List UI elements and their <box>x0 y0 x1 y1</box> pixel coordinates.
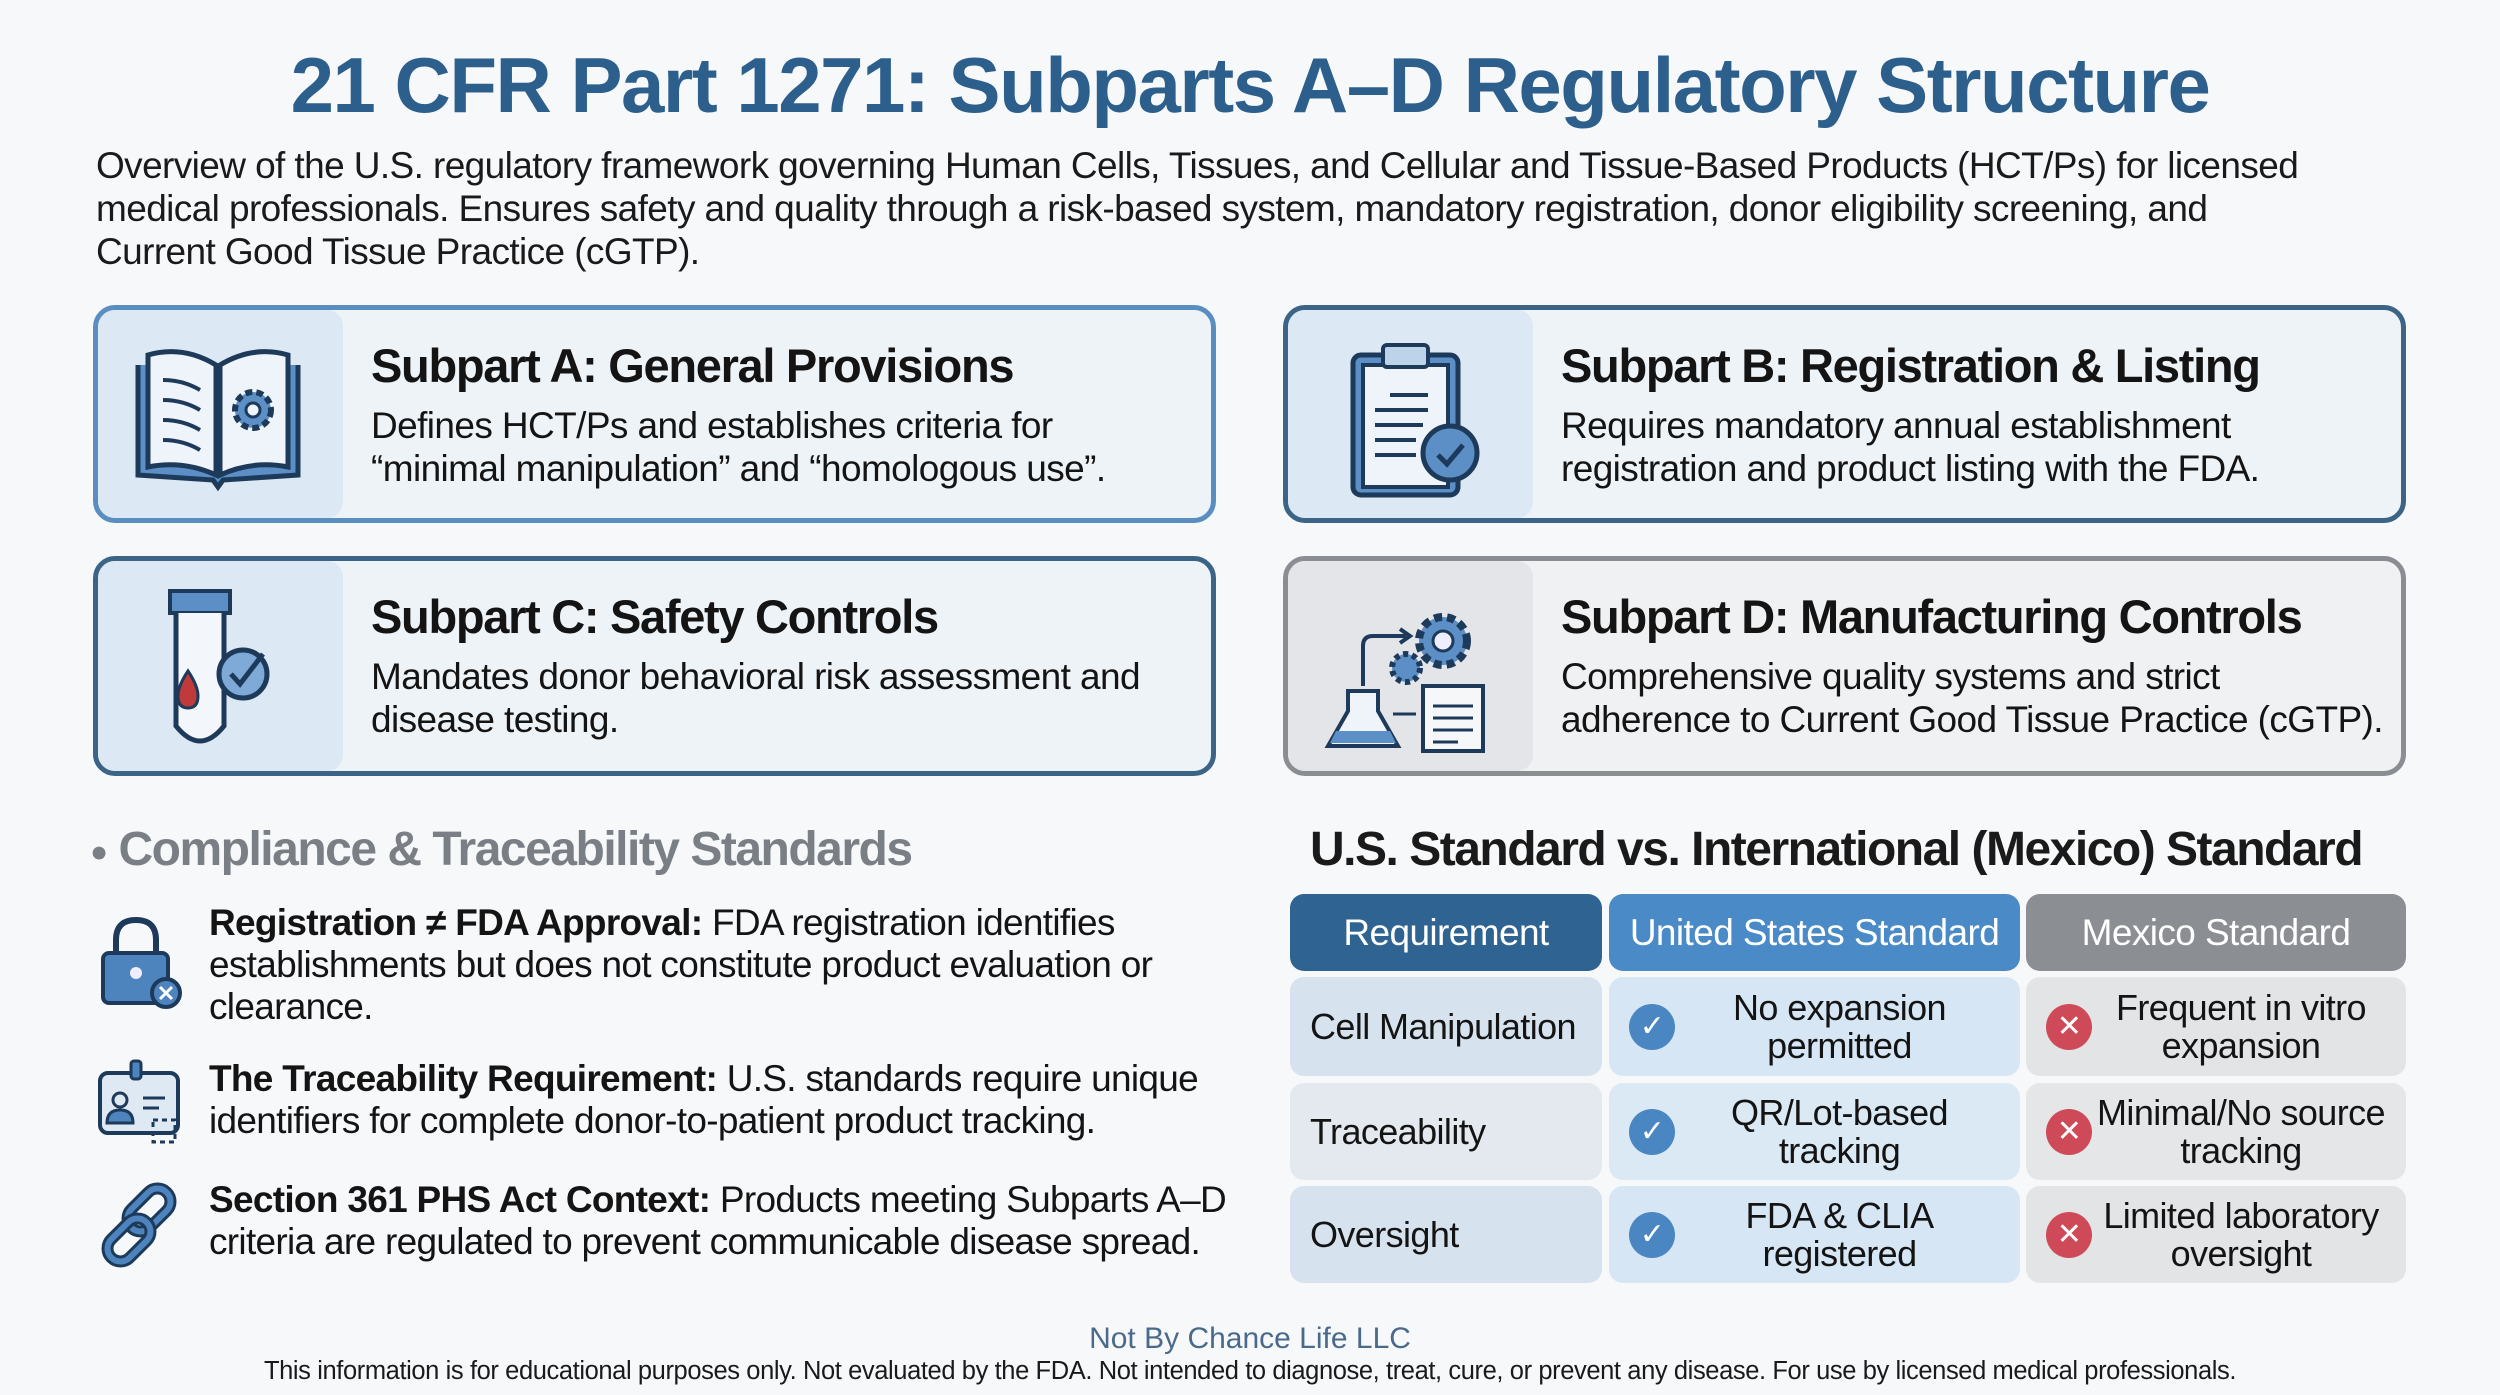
comparison table: permitted <box>1767 1024 1912 1066</box>
comparison table: Frequent in vitro <box>2116 986 2366 1028</box>
comparison table: ✕ <box>2057 1114 2081 1148</box>
header: requirement <box>1290 894 1602 971</box>
icon: chain link <box>102 1182 176 1268</box>
subtitle text block: Current Good Tissue Practice (cGTP). <box>96 231 699 272</box>
header: Mexico: Mexico Standard <box>2082 912 2350 952</box>
comparison table: oversight <box>2171 1232 2311 1274</box>
header: Mexico <box>2026 894 2406 971</box>
icon: lock <box>101 917 182 1009</box>
text: registration item <box>209 902 1152 1027</box>
comparison table: registered <box>1762 1232 1917 1274</box>
comparison table: ✓ <box>1640 1218 1664 1250</box>
panel: Subpart B: registration and product listing with the FDA. <box>1561 448 2259 489</box>
icon: book with gear <box>136 349 300 492</box>
header: US <box>1609 894 2020 971</box>
panel: Subpart A <box>93 305 1216 523</box>
row: oversight: Oversight <box>1310 1214 1459 1254</box>
text: registration item: Registration ≠ FDA Approval: FDA registration identifies <box>209 902 1115 943</box>
comparison table: tracking <box>2180 1130 2302 1170</box>
panel: Subpart A: Subpart A: General Provisions <box>371 339 1013 392</box>
panel: Subpart C: Subpart C: Safety Controls <box>371 590 938 643</box>
text: registration item: clearance. <box>209 986 373 1027</box>
comparison table: QR/Lot-based <box>1731 1092 1948 1132</box>
comparison table: Minimal/No source <box>2097 1092 2385 1132</box>
text: section 361 item: Section 361 PHS Act Context: Products meeting Subparts A–D <box>209 1179 1226 1220</box>
text: traceability item: The Traceability Requirement: U.S. standards require unique <box>209 1058 1198 1099</box>
heading: comparison: U.S. Standard vs. International (Mexico) Standard <box>1310 823 2362 876</box>
header: US: United States Standard <box>1630 912 1999 952</box>
row: cell manipulation <box>1290 977 1602 1076</box>
icon: test tube with blood drop <box>168 589 270 744</box>
comparison table: ✓ <box>1640 1114 1664 1148</box>
footer: company: Not By Chance Life LLC <box>1089 1322 1411 1355</box>
panel: Subpart D: Comprehensive quality systems and strict <box>1561 656 2220 697</box>
icon: flask, gears and document <box>1324 613 1485 753</box>
row: oversight <box>1290 1186 1602 1283</box>
row: traceability <box>1290 1083 1602 1180</box>
heading: compliance: ● Compliance & Traceability Standards <box>90 823 912 876</box>
subtitle text block: medical professionals. Ensures safety and quality through a risk-based system, mandatory registration, donor eligibility screening, and <box>96 188 2207 229</box>
comparison table: FDA & CLIA <box>1745 1194 1934 1236</box>
panel: Subpart B: Requires mandatory annual establishment <box>1561 405 2231 446</box>
text: traceability item <box>209 1058 1198 1141</box>
panel: Subpart B <box>1283 305 2406 523</box>
icon: clipboard with check <box>1350 343 1480 498</box>
comparison table: No expansion <box>1733 986 1946 1028</box>
row: cell manipulation: Cell Manipulation <box>1310 1006 1576 1046</box>
icon: ID badge <box>98 1060 180 1144</box>
comparison table <box>1290 894 2406 1283</box>
subtitle text block <box>96 145 2298 272</box>
text: traceability item: identifiers for complete donor-to-patient product tracking. <box>209 1100 1095 1141</box>
comparison table: ✓ <box>1640 1010 1664 1042</box>
panel: Subpart D <box>1283 556 2406 776</box>
panel: Subpart C <box>93 556 1216 776</box>
panel: Subpart C: disease testing. <box>371 699 619 740</box>
header: requirement: Requirement <box>1343 912 1549 952</box>
panel: Subpart A: “minimal manipulation” and “homologous use”. <box>371 448 1106 489</box>
comparison table: ✕ <box>2057 1010 2081 1042</box>
text: registration item: establishments but does not constitute product evaluation or <box>209 944 1152 985</box>
comparison table: expansion <box>2162 1024 2320 1066</box>
text: section 361 item <box>209 1179 1226 1262</box>
comparison table: Limited laboratory <box>2103 1194 2379 1236</box>
panel: Subpart D: adherence to Current Good Tissue Practice (cGTP). <box>1561 699 2383 740</box>
panel: Subpart A: Defines HCT/Ps and establishes criteria for <box>371 405 1053 446</box>
row: traceability: Traceability <box>1310 1110 1486 1152</box>
panel: Subpart D: Subpart D: Manufacturing Controls <box>1561 590 2301 643</box>
panel: Subpart B: Subpart B: Registration & Listing <box>1561 339 2260 392</box>
comparison table: ✕ <box>2057 1218 2081 1250</box>
text: section 361 item: criteria are regulated to prevent communicable disease spread. <box>209 1221 1200 1262</box>
title: 21 CFR Part 1271: Subparts A–D Regulatory Structure <box>291 41 2209 129</box>
panel: Subpart C: Mandates donor behavioral risk assessment and <box>371 656 1140 697</box>
comparison table: tracking <box>1779 1130 1900 1170</box>
footer: disclaimer: This information is for educational purposes only. Not evaluated by the FDA. Not intended to diagnose, treat, cure, or prevent any disease. For use by licensed medical professionals. <box>264 1357 2236 1385</box>
subtitle text block: Overview of the U.S. regulatory framework governing Human Cells, Tissues, and Cellular and Tissue-Based Products (HCT/Ps) for licensed <box>96 145 2298 186</box>
